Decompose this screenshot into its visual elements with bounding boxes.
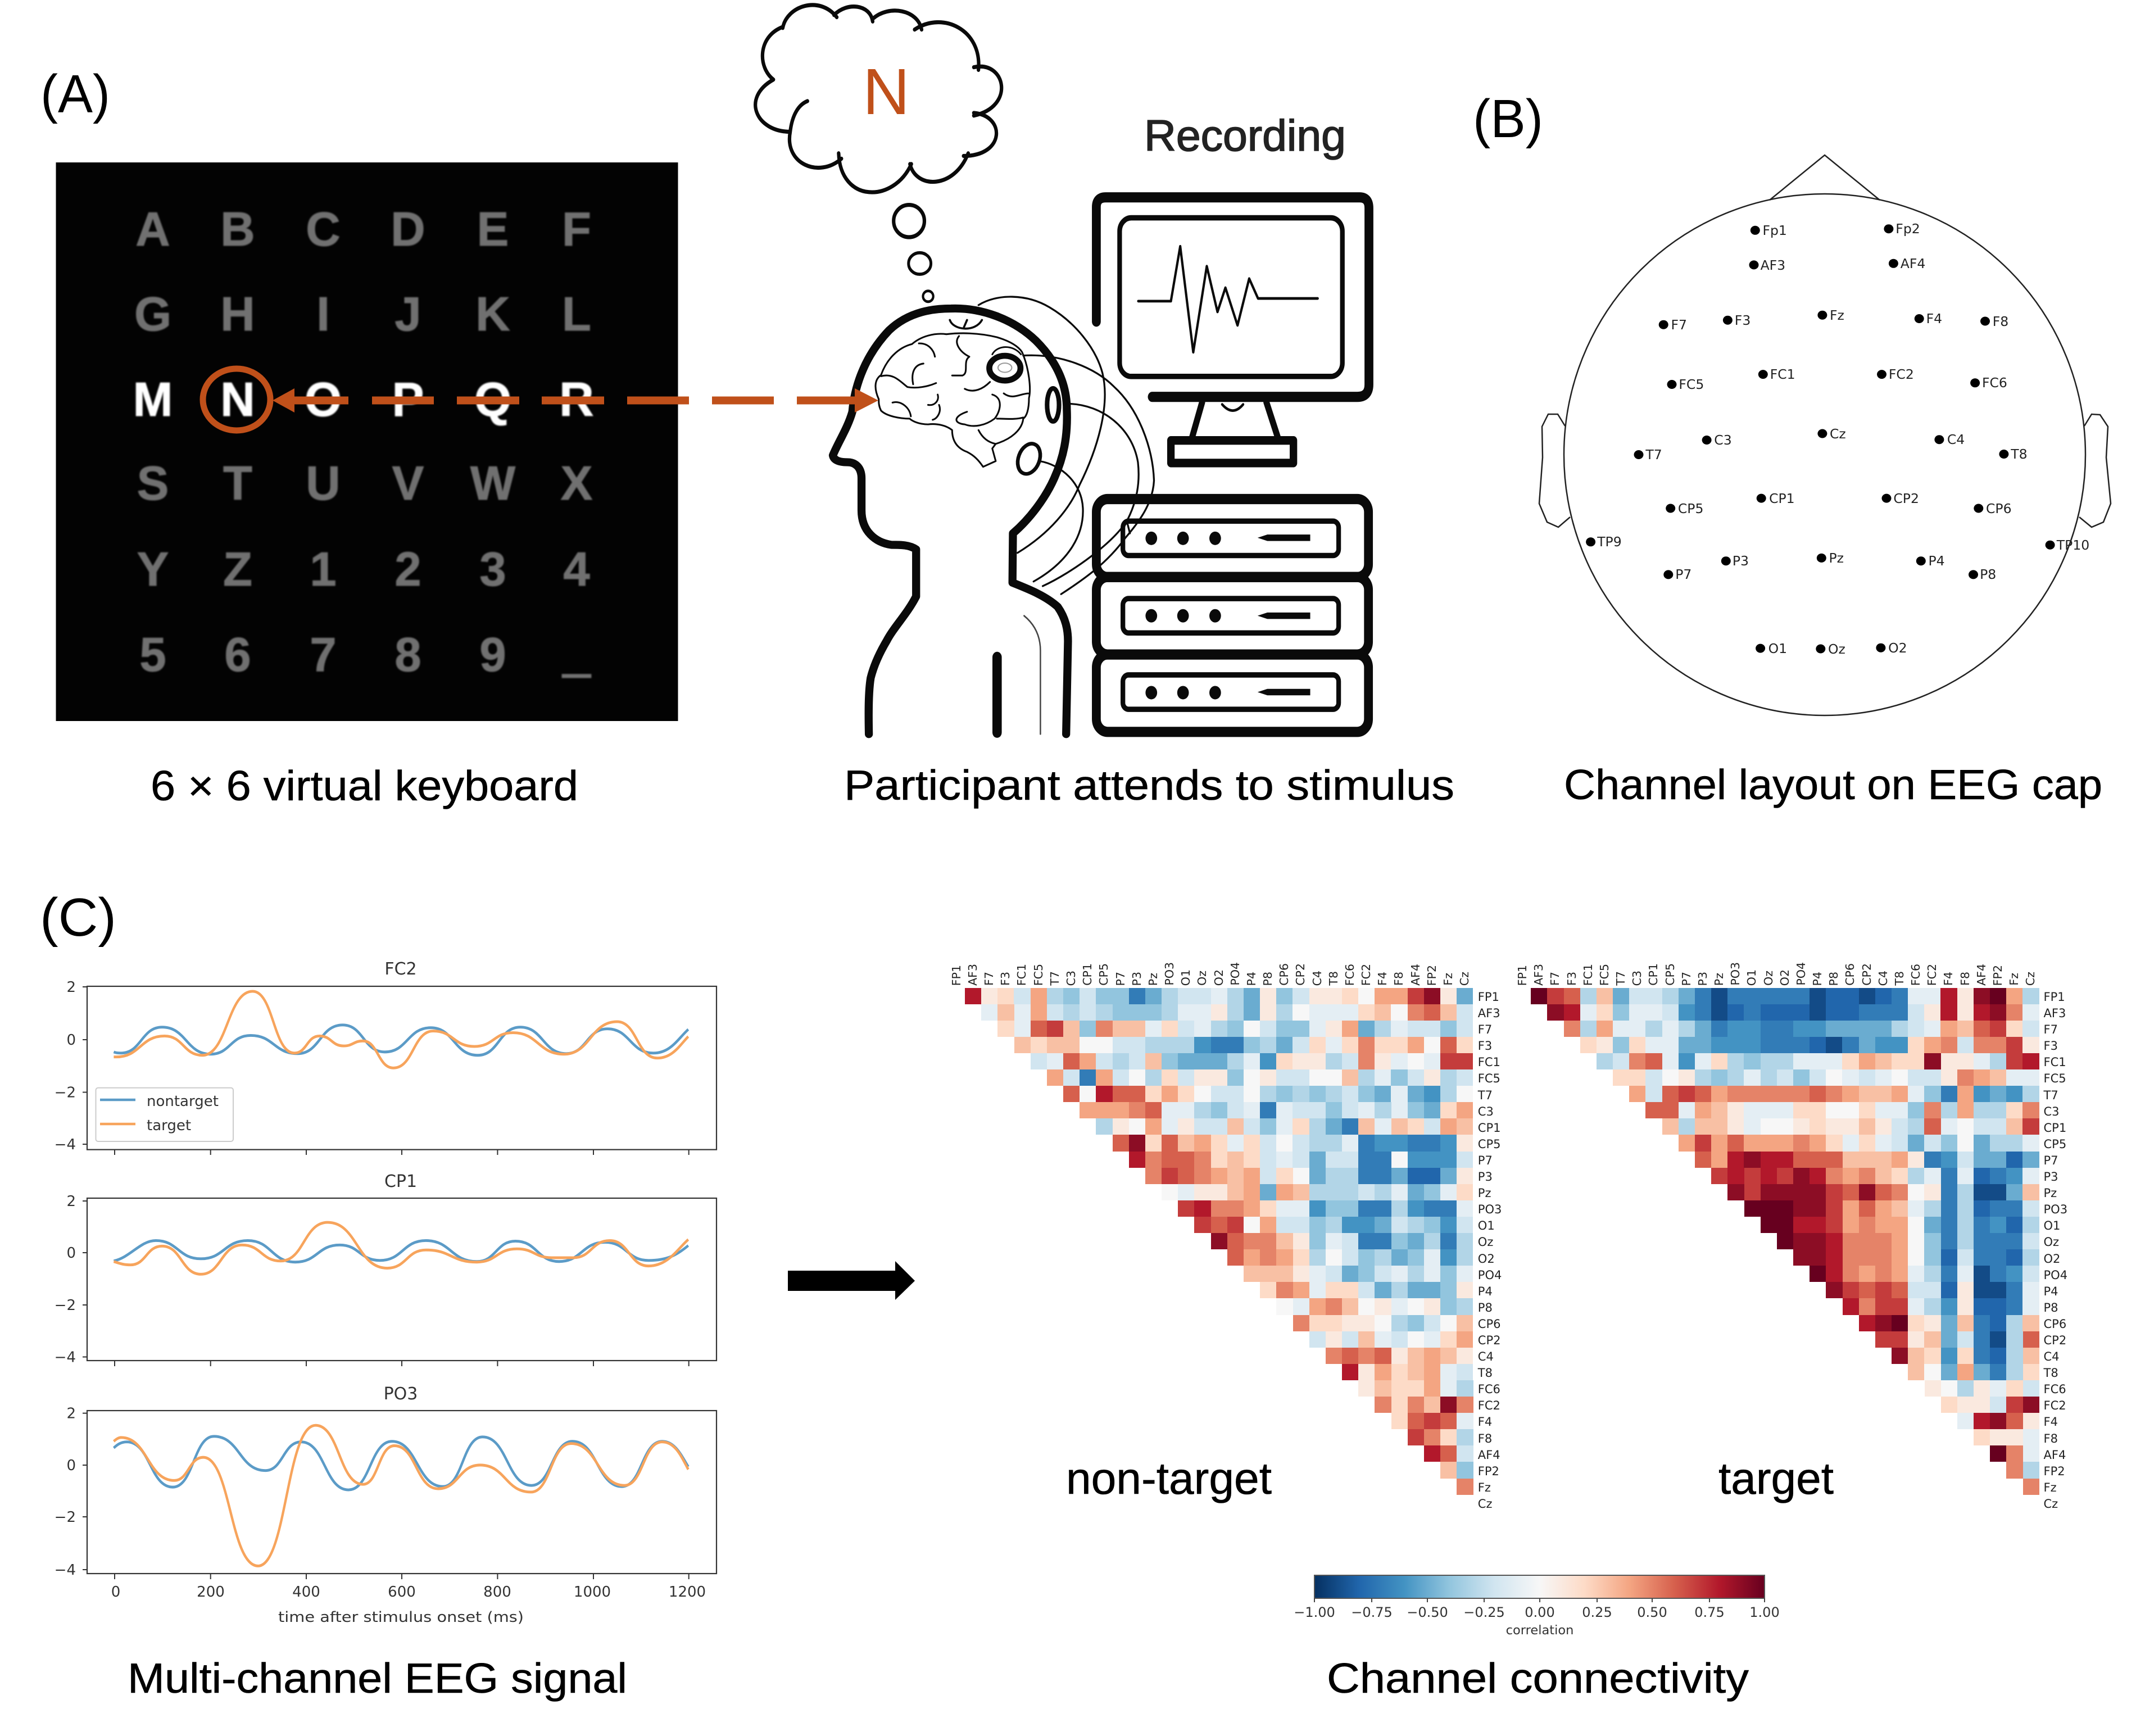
keyboard letters: B — [220, 203, 255, 256]
target column labels — [1516, 962, 2037, 986]
non-target row labels: FP2 — [1478, 1465, 1499, 1478]
keyboard letters: U — [306, 457, 341, 510]
target row labels: C3 — [2043, 1105, 2060, 1118]
thought letter N: N — [863, 55, 910, 128]
keyboard letters: S — [137, 457, 169, 510]
non-target column labels: AF3 — [966, 964, 979, 986]
electrode labels: P3 — [1733, 553, 1749, 569]
target column labels: FC5 — [1598, 964, 1611, 986]
time axis tick labels: 400 — [292, 1584, 320, 1601]
electrode labels: C4 — [1947, 432, 1965, 447]
target row labels: PO3 — [2043, 1203, 2067, 1216]
chart: FC2: 2 — [66, 979, 76, 996]
electrode labels: CP5 — [1678, 501, 1703, 516]
non-target column labels: CP2 — [1294, 963, 1307, 986]
target column labels: O2 — [1778, 969, 1792, 986]
non-target row labels: FC2 — [1478, 1399, 1500, 1412]
target column labels: P4 — [1811, 972, 1824, 986]
keyboard letters: G — [134, 288, 171, 341]
keyboard letters: E — [477, 203, 509, 256]
keyboard letters: T — [223, 457, 252, 510]
electrode labels: O2 — [1888, 640, 1907, 656]
keyboard letters: X — [561, 457, 592, 510]
target row labels: FC2 — [2043, 1399, 2066, 1412]
non-target correlation cells — [965, 988, 1473, 1495]
target row labels: FC5 — [2043, 1072, 2066, 1085]
electrode labels: C3 — [1714, 432, 1732, 448]
target row labels: F8 — [2043, 1432, 2058, 1445]
electrode labels: F3 — [1735, 312, 1751, 328]
non-target row labels: Cz — [1478, 1497, 1492, 1511]
electrodes — [950, 320, 1059, 477]
chart: PO3: −2 — [55, 1509, 76, 1526]
target column labels: PO4 — [1794, 962, 1808, 986]
electrode labels: CP1 — [1769, 491, 1795, 506]
electrode labels: Fp2 — [1895, 221, 1920, 237]
heatmap panel: non-target — [950, 962, 1502, 1511]
colour bar legend: correlation — [1506, 1623, 1573, 1638]
heading: Recording: Recording — [1144, 111, 1346, 160]
target column labels: P7 — [1680, 972, 1693, 986]
non-target column labels: P8 — [1261, 972, 1275, 986]
electrode labels: CP6 — [1986, 501, 2012, 516]
electrode labels: CP2 — [1893, 491, 1919, 506]
keyboard letters — [133, 203, 594, 682]
chart: FC2: −4 — [55, 1136, 76, 1153]
non-target row labels: PO3 — [1478, 1203, 1502, 1216]
non-target row labels: P8 — [1478, 1301, 1493, 1315]
non-target column labels: C3 — [1064, 971, 1078, 986]
chart: FC2: −2 — [55, 1085, 76, 1102]
non-target row labels: FC6 — [1478, 1383, 1500, 1396]
non-target column labels: FC1 — [1015, 964, 1028, 986]
non-target row labels: O2 — [1478, 1252, 1495, 1266]
non-target row labels — [1478, 990, 1502, 1511]
electrode labels: T7 — [1645, 447, 1662, 463]
non-target column labels: O1 — [1179, 969, 1192, 986]
colour bar legend: 0.25 — [1582, 1604, 1612, 1620]
target row labels: O2 — [2043, 1252, 2060, 1266]
non-target column labels: FC6 — [1343, 964, 1357, 986]
target row labels — [2043, 990, 2067, 1511]
keyboard background — [56, 162, 678, 721]
time axis tick labels — [111, 1584, 706, 1601]
non-target row labels: C3 — [1478, 1105, 1494, 1118]
target row labels: Oz — [2043, 1235, 2059, 1249]
keyboard letters: C — [306, 203, 341, 256]
colour bar legend: 0.50 — [1637, 1604, 1667, 1620]
keyboard letters: 1 — [310, 543, 337, 596]
electrode labels: AF4 — [1901, 256, 1925, 271]
non-target row labels: CP5 — [1478, 1137, 1500, 1151]
caption: channel layout: Channel layout on EEG cap — [1564, 761, 2102, 808]
target column labels: C4 — [1876, 971, 1890, 986]
electrode labels: Cz — [1830, 426, 1846, 442]
keyboard letters: W — [470, 457, 516, 510]
non-target column labels: FC5 — [1032, 964, 1045, 986]
target row labels: O1 — [2043, 1219, 2060, 1232]
electrode labels: TP10 — [2056, 537, 2089, 553]
electrode labels: FC6 — [1982, 375, 2007, 391]
head outline with nose and ears — [1539, 155, 2111, 715]
chart: CP1: 2 — [66, 1193, 76, 1210]
chart: CP1 — [55, 1172, 716, 1366]
target row labels: T7 — [2043, 1089, 2058, 1102]
non-target row labels: FC1 — [1478, 1055, 1500, 1069]
electrode labels: O1 — [1768, 641, 1787, 656]
heatmap panel: target — [1516, 962, 2067, 1511]
electrode dots — [1586, 224, 2055, 653]
electrode labels: Oz — [1828, 641, 1845, 657]
chart: CP1: 0 — [66, 1245, 76, 1262]
server stack — [1096, 499, 1368, 732]
target column labels: Pz — [1712, 973, 1726, 986]
keyboard letters: V — [392, 457, 424, 510]
keyboard letters: _ — [563, 628, 591, 682]
thought cloud — [755, 5, 1001, 302]
electrode labels — [1597, 221, 2089, 657]
colour bar legend: 0.75 — [1694, 1604, 1725, 1620]
panel label C: (C) — [40, 887, 116, 948]
chart: PO3: 2 — [66, 1406, 76, 1422]
non-target row labels: Oz — [1478, 1235, 1493, 1249]
target column labels: FP1 — [1516, 965, 1529, 986]
non-target row labels: F7 — [1478, 1023, 1492, 1036]
keyboard letters: R — [559, 373, 594, 427]
non-target column labels: F7 — [982, 972, 996, 986]
non-target row labels: AF3 — [1478, 1007, 1500, 1020]
target column labels: AF4 — [1975, 964, 1988, 986]
brain — [876, 333, 1030, 467]
caption: keyboard: 6 × 6 virtual keyboard — [151, 762, 578, 809]
target column labels: F3 — [1565, 972, 1579, 986]
target row labels: T8 — [2043, 1366, 2058, 1380]
non-target row labels: F8 — [1478, 1432, 1492, 1445]
chart: FC2: FC2 — [384, 959, 417, 979]
black arrow to connectivity — [788, 1261, 915, 1300]
non-target column labels: Pz — [1146, 973, 1160, 986]
non-target column labels: FP1 — [950, 965, 963, 986]
colour bar legend: 1.00 — [1749, 1604, 1780, 1620]
electrode labels: FC1 — [1770, 366, 1795, 382]
electrode labels: F8 — [1993, 314, 2008, 329]
time axis tick labels: 600 — [388, 1584, 416, 1601]
person silhouette — [833, 309, 1068, 734]
target row labels: PO4 — [2043, 1268, 2067, 1282]
target row labels: F7 — [2043, 1023, 2058, 1036]
target column labels: FP2 — [1991, 965, 2005, 986]
keyboard letters: J — [394, 288, 421, 341]
electrode labels: FC2 — [1889, 366, 1914, 382]
target correlation cells — [1531, 988, 2039, 1495]
target row labels: FP1 — [2043, 990, 2065, 1004]
time axis tick labels: 0 — [111, 1584, 120, 1601]
non-target column labels: Fz — [1441, 973, 1455, 986]
panel: EEG signal line charts — [55, 959, 716, 1626]
keyboard letters: F — [562, 203, 591, 256]
keyboard letters: 9 — [479, 628, 506, 682]
target column labels: Cz — [2024, 972, 2037, 986]
caption: non-target: non-target — [1066, 1453, 1272, 1503]
colour bar legend — [1294, 1575, 1780, 1638]
chart: CP1: −2 — [55, 1297, 76, 1314]
keyboard letters: 7 — [310, 628, 337, 682]
legend: nontarget — [147, 1093, 219, 1110]
non-target row labels: AF4 — [1478, 1448, 1500, 1462]
non-target row labels: P3 — [1478, 1170, 1493, 1184]
keyboard letters: 8 — [394, 628, 421, 682]
non-target row labels: CP1 — [1478, 1121, 1500, 1135]
target column labels: FC1 — [1581, 964, 1595, 986]
target row labels: Pz — [2043, 1186, 2057, 1200]
chart: FC2 — [55, 959, 716, 1155]
participant head and brain — [833, 297, 1154, 734]
keyboard letters: 2 — [394, 543, 421, 596]
keyboard letters: D — [391, 203, 425, 256]
target row labels: AF3 — [2043, 1007, 2066, 1020]
non-target column labels: Cz — [1458, 972, 1471, 986]
non-target column labels: T7 — [1048, 971, 1062, 986]
non-target row labels: CP6 — [1478, 1317, 1500, 1331]
colour bar legend: 0.00 — [1525, 1604, 1555, 1620]
keyboard letters: 3 — [479, 543, 506, 596]
target row labels: F4 — [2043, 1415, 2058, 1429]
non-target row labels: F3 — [1478, 1039, 1492, 1053]
illustration: participant and recording equipment — [755, 5, 1369, 734]
non-target column labels: CP5 — [1097, 963, 1110, 986]
target row labels: Fz — [2043, 1481, 2057, 1494]
non-target column labels: T8 — [1327, 971, 1340, 986]
non-target row labels: CP2 — [1478, 1334, 1500, 1347]
keyboard letters: K — [475, 288, 510, 341]
keyboard letters: 6 — [224, 628, 251, 682]
keyboard letters: I — [316, 288, 330, 341]
target column labels: PO3 — [1729, 962, 1742, 986]
torso details — [997, 616, 1040, 734]
target column labels: C3 — [1630, 971, 1644, 986]
non-target column labels: F3 — [999, 972, 1012, 986]
target column labels: CP6 — [1843, 963, 1857, 986]
target row labels: CP6 — [2043, 1317, 2066, 1331]
non-target row labels: O1 — [1478, 1219, 1495, 1232]
target row labels: FP2 — [2043, 1465, 2065, 1478]
target column labels: O1 — [1745, 969, 1758, 986]
time axis tick labels: 1200 — [669, 1584, 706, 1601]
dashed stimulus arrow — [273, 388, 878, 413]
target row labels: CP5 — [2043, 1137, 2066, 1151]
electrode labels: Fz — [1830, 307, 1844, 323]
target column labels: T8 — [1893, 971, 1906, 986]
electrode labels: Fp1 — [1762, 223, 1787, 238]
selected letter circle — [203, 369, 270, 430]
panel: EEG channel layout — [1539, 155, 2111, 715]
caption: channel connectivity: Channel connectivity — [1327, 1655, 1749, 1702]
non-target column labels: FC2 — [1359, 964, 1373, 986]
non-target column labels: CP6 — [1277, 963, 1291, 986]
target column labels: P8 — [1827, 972, 1840, 986]
target row labels: FC1 — [2043, 1055, 2066, 1069]
non-target row labels: FC5 — [1478, 1072, 1500, 1085]
electrode wires — [978, 297, 1154, 594]
caption: EEG signal: Multi-channel EEG signal — [128, 1655, 627, 1702]
target row labels: P3 — [2043, 1170, 2058, 1184]
colour bar legend: −0.50 — [1407, 1604, 1448, 1620]
keyboard letters: M — [133, 373, 173, 427]
colour bar legend: −0.25 — [1463, 1604, 1505, 1620]
keyboard letters: A — [135, 203, 170, 256]
colour bar legend: −1.00 — [1294, 1604, 1335, 1620]
target column labels: F8 — [1958, 972, 1972, 986]
target column labels: P3 — [1696, 972, 1709, 986]
target column labels: FC6 — [1909, 964, 1922, 986]
electrode labels: FC5 — [1679, 377, 1704, 392]
non-target row labels: P4 — [1478, 1285, 1493, 1298]
keyboard letters: 4 — [563, 543, 590, 596]
target column labels: T7 — [1614, 971, 1627, 986]
electrode labels: P4 — [1929, 553, 1945, 569]
non-target row labels: T7 — [1478, 1089, 1493, 1102]
non-target column labels — [950, 962, 1471, 986]
keyboard letters: O — [305, 373, 342, 427]
electrode labels: P8 — [1980, 566, 1996, 582]
time axis label: time after stimulus onset (ms) — [278, 1609, 524, 1626]
non-target column labels: P3 — [1130, 972, 1144, 986]
keyboard letters: N — [220, 373, 255, 427]
electrode labels: Pz — [1829, 550, 1844, 566]
chart: CP1: −4 — [55, 1349, 76, 1366]
chart: FC2: 0 — [66, 1032, 76, 1049]
non-target row labels: P7 — [1478, 1154, 1493, 1167]
target column labels: Fz — [2007, 973, 2021, 986]
target column labels: Oz — [1762, 971, 1775, 986]
non-target column labels: AF4 — [1409, 964, 1422, 986]
non-target column labels: O2 — [1212, 969, 1226, 986]
electrode labels: F4 — [1926, 311, 1942, 327]
time axis tick labels: 800 — [483, 1584, 511, 1601]
chart: PO3 — [55, 1384, 716, 1626]
target row labels: F3 — [2043, 1039, 2058, 1053]
target row labels: P7 — [2043, 1154, 2058, 1167]
target row labels: CP2 — [2043, 1334, 2066, 1347]
keyboard letters: Q — [474, 373, 511, 427]
target column labels: CP2 — [1860, 963, 1874, 986]
non-target column labels: P4 — [1245, 972, 1258, 986]
non-target column labels: FP2 — [1425, 965, 1439, 986]
non-target row labels: T8 — [1478, 1366, 1493, 1380]
keyboard letters: H — [220, 288, 255, 341]
keyboard letters: L — [562, 288, 591, 341]
target row labels: C4 — [2043, 1350, 2060, 1363]
time axis tick labels: 200 — [197, 1584, 225, 1601]
non-target row labels: Fz — [1478, 1481, 1491, 1494]
chart: PO3: PO3 — [384, 1384, 418, 1404]
non-target row labels: PO4 — [1478, 1268, 1502, 1282]
monitor — [1096, 197, 1369, 463]
electrode labels: TP9 — [1597, 534, 1622, 550]
non-target row labels: F4 — [1478, 1415, 1492, 1429]
electrode labels: F7 — [1671, 317, 1687, 333]
legend: target — [147, 1117, 191, 1134]
non-target column labels: C4 — [1310, 971, 1324, 986]
non-target column labels: PO3 — [1163, 962, 1176, 986]
panel: virtual keyboard — [56, 162, 678, 721]
chart: CP1: CP1 — [384, 1172, 417, 1191]
target column labels: CP1 — [1647, 963, 1660, 986]
non-target column labels: F8 — [1392, 972, 1405, 986]
non-target column labels: Oz — [1195, 971, 1209, 986]
time axis tick labels: 1000 — [574, 1584, 611, 1601]
target row labels: P4 — [2043, 1285, 2058, 1298]
equipment and thought cloud — [755, 5, 1369, 734]
non-target column labels: CP1 — [1081, 963, 1094, 986]
non-target row labels: C4 — [1478, 1350, 1494, 1363]
target row labels: FC6 — [2043, 1383, 2066, 1396]
non-target column labels: F4 — [1376, 972, 1389, 986]
non-target column labels: PO4 — [1228, 962, 1242, 986]
caption: target: target — [1718, 1453, 1834, 1503]
chart: PO3: −4 — [55, 1562, 76, 1579]
electrode labels: P7 — [1675, 566, 1691, 582]
caption: participant: Participant attends to stimulus — [844, 762, 1454, 809]
keyboard letters: Z — [223, 543, 252, 596]
non-target column labels: P7 — [1114, 972, 1127, 986]
keyboard letters: Y — [137, 543, 169, 596]
keyboard letters: P — [392, 373, 424, 427]
legend — [96, 1088, 233, 1141]
colour bar legend: −0.75 — [1351, 1604, 1393, 1620]
target row labels: P8 — [2043, 1301, 2058, 1315]
panel label B: (B) — [1473, 89, 1543, 149]
target column labels: F4 — [1942, 972, 1955, 986]
target row labels: AF4 — [2043, 1448, 2066, 1462]
electrode labels: AF3 — [1761, 257, 1785, 273]
panel label A: (A) — [40, 64, 110, 124]
non-target row labels: Pz — [1478, 1186, 1491, 1200]
electrode labels: T8 — [2010, 446, 2028, 462]
non-target row labels: FP1 — [1478, 990, 1499, 1004]
target row labels: CP1 — [2043, 1121, 2066, 1135]
target column labels: FC2 — [1925, 964, 1939, 986]
keyboard letters: 5 — [139, 628, 166, 682]
target column labels: F7 — [1548, 972, 1562, 986]
chart: PO3: 0 — [66, 1457, 76, 1474]
target column labels: AF3 — [1532, 964, 1545, 986]
target column labels: CP5 — [1663, 963, 1677, 986]
target row labels: Cz — [2043, 1497, 2058, 1511]
